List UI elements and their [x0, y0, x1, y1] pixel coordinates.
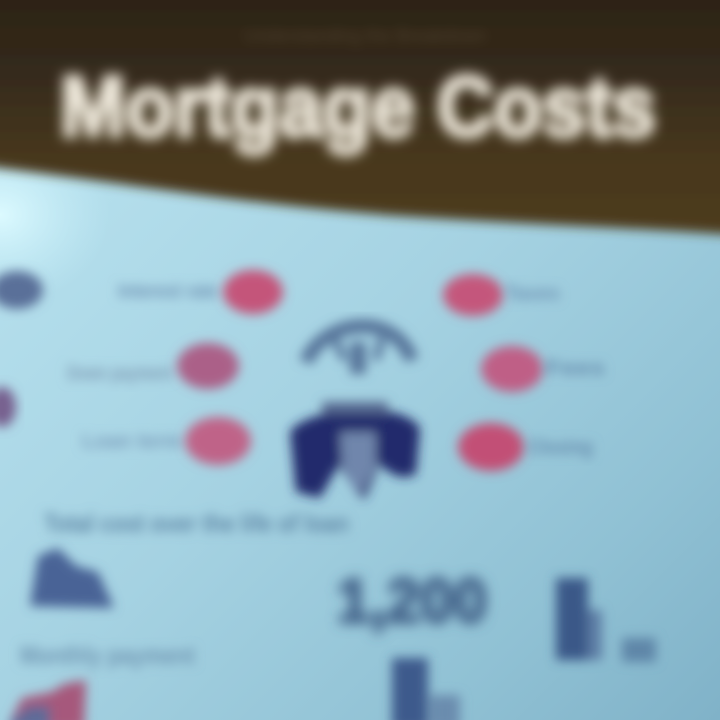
left edge icon top: [0, 271, 43, 309]
left column item 1: [118, 270, 283, 314]
panel: dark brown header band: [0, 0, 720, 236]
label 2 left: Down payment: [67, 362, 172, 385]
subtitle: Understanding the Breakdown: [244, 26, 486, 46]
icon: chart bottom left: [30, 548, 114, 608]
bar chart bottom center: [392, 658, 460, 720]
bar chart right: [556, 578, 656, 662]
pink badge 2 right: [481, 346, 543, 392]
right column item 2: [481, 346, 605, 392]
pink badge 1 left: [223, 270, 283, 314]
right column item 3: [458, 423, 593, 471]
icon: pink chart corner: [10, 680, 86, 720]
label 1 right: Taxes: [505, 282, 560, 305]
big number: 1,200: [337, 567, 487, 636]
pink badge 3 right: [458, 423, 524, 471]
icon: dark house: [290, 402, 420, 500]
left column item 2: [67, 343, 239, 389]
left edge icon bottom: [0, 387, 16, 427]
left column item 3: [82, 417, 251, 465]
label 3 right: Closing: [528, 436, 593, 459]
icon: roof arc: [306, 326, 412, 374]
label 1 left: Interest rate: [118, 280, 218, 303]
pink badge 3 left: [185, 417, 251, 465]
pink badge 1 right: [443, 274, 503, 316]
label 2 right: Fees: [545, 357, 605, 380]
pink badge 2 left: [177, 343, 239, 389]
label 3 left: Loan term: [82, 430, 182, 453]
right column item 1: [443, 274, 560, 316]
title: Mortgage Costs: [60, 59, 656, 155]
section heading: Total cost over the life of loan: [44, 508, 349, 538]
lower left label: Monthly payment: [20, 640, 195, 670]
